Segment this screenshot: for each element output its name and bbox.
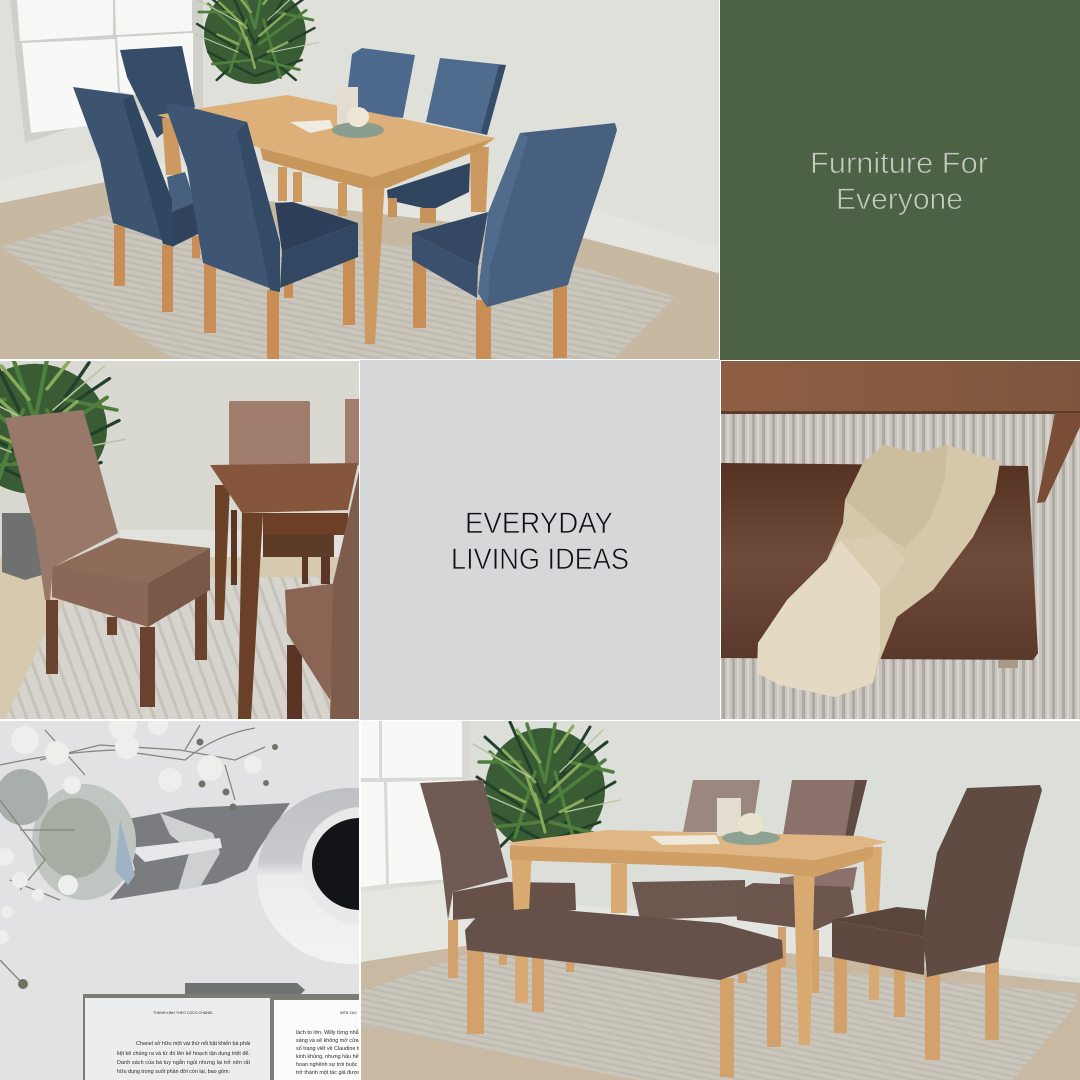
book text: Chanel sở hữu một vài thứ nổi bật khiến bà phải bbox=[136, 1040, 250, 1047]
photo: table flat lay with coffee and book bbox=[0, 721, 359, 1080]
book text: hoan nghênh sự trói buộc đó bbox=[296, 1062, 365, 1068]
heading: Everyday Living Ideas: LIVING IDEAS bbox=[451, 543, 629, 576]
book text: sáng và sẽ không mở cửa ch bbox=[296, 1037, 366, 1044]
right chair bbox=[412, 123, 617, 360]
baby's breath flowers bbox=[0, 713, 278, 989]
book text: KIẾN TẠO bbox=[340, 1010, 357, 1015]
photo: bench with knitted throw bbox=[720, 360, 1080, 720]
left chair bbox=[420, 780, 576, 978]
plant bbox=[194, 0, 319, 84]
window bbox=[361, 720, 471, 962]
plant bbox=[473, 722, 620, 852]
knitted throw bbox=[757, 445, 1000, 697]
photo: brown leather chair bbox=[0, 358, 360, 721]
left chair bbox=[73, 87, 200, 312]
book text: THÀNH KINH THEO COCO CHANEL bbox=[153, 1011, 213, 1015]
photo: dining set with bench and brown chairs bbox=[360, 720, 1080, 1080]
rear chairs bbox=[229, 399, 360, 585]
window bbox=[10, 0, 203, 143]
tableware bbox=[290, 87, 384, 138]
right edge chair bbox=[285, 467, 360, 720]
photo: dining set with blue chairs bbox=[0, 0, 720, 360]
plant pot bbox=[2, 513, 42, 580]
heading: Everyday Living Ideas: EVERYDAY bbox=[465, 507, 613, 540]
book text: lách to lớn, Willy từng nhắ bbox=[296, 1029, 359, 1036]
book text: Danh sách của bà tuy ngắn ngủi nhưng lại trở nên rất bbox=[117, 1059, 250, 1066]
table bbox=[506, 830, 887, 1045]
heading: Furniture For Everyone: Furniture For bbox=[810, 147, 988, 180]
right chair bbox=[832, 785, 1042, 1060]
glass vase bbox=[0, 769, 136, 900]
book text: trở thành một tác giả được bbox=[296, 1069, 360, 1076]
centre chair bbox=[165, 104, 358, 360]
panel: grey title bbox=[360, 360, 720, 720]
rear chairs bbox=[120, 46, 506, 223]
table bbox=[157, 95, 495, 344]
open book bbox=[83, 983, 366, 1080]
book text: kinh khủng, nhưng hầu hết c bbox=[296, 1053, 365, 1060]
book text: số trang viết về Claudine tron bbox=[296, 1046, 366, 1052]
book text bbox=[117, 1010, 366, 1076]
rear chairs bbox=[632, 780, 867, 993]
sunlit shadow bbox=[110, 803, 290, 900]
floor bbox=[360, 940, 1080, 1080]
bench bbox=[465, 908, 783, 1077]
coffee cup and saucer bbox=[257, 788, 359, 964]
table bbox=[210, 463, 358, 720]
baseboard bbox=[575, 905, 1080, 978]
rug bbox=[360, 953, 1078, 1080]
bench bbox=[720, 463, 1038, 660]
front chair bbox=[5, 410, 210, 707]
tableware bbox=[650, 798, 780, 845]
heading: Furniture For Everyone: Everyone bbox=[836, 183, 963, 216]
plant bbox=[0, 358, 125, 494]
panel: green title bbox=[720, 0, 1080, 360]
book text: hữu dụng trong suốt phần đời còn lại, bao gồm: bbox=[117, 1069, 230, 1075]
book text: liệt kê chúng ra và từ đó lên kế hoạch tận dụng triệt để. bbox=[117, 1050, 250, 1057]
